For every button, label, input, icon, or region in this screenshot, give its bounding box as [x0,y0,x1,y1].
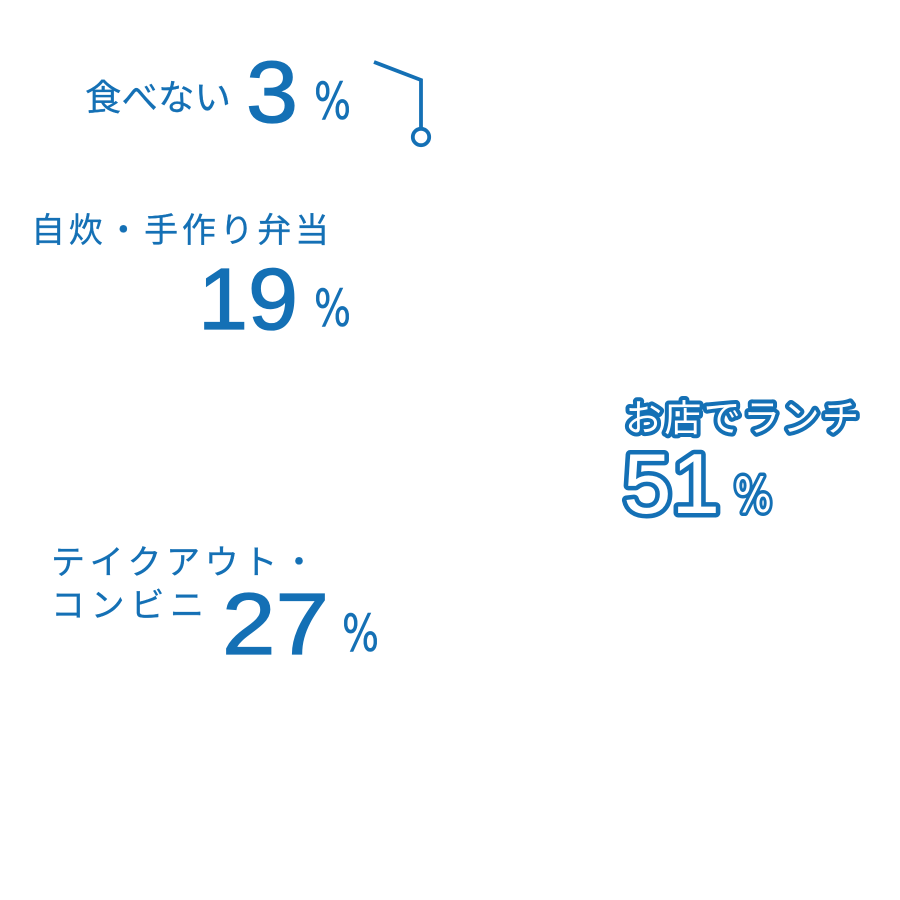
unit: percent: % [314,73,351,132]
unit: percent: % [734,468,772,524]
item: eating out 51% [623,398,859,532]
label: takeout: テイクアウト・ [51,544,316,582]
label: restaurant lunch: お店でランチ [625,398,859,439]
unit: percent: % [314,280,351,339]
value: 51: 51 [623,437,720,532]
unit: percent: % [342,605,379,664]
value: 3: 3 [246,44,298,141]
label: no lunch: 食べない [85,77,231,118]
value: 19: 19 [198,251,298,348]
label: convenience store: コンビニ [51,587,204,625]
value: 27: 27 [222,576,329,673]
item: home-made lunch 19% [31,212,351,348]
item: takeout or convenience store 27% [51,544,379,673]
leader line with ring marker [374,62,429,145]
label: home-made bento: 自炊・手作り弁当 [31,212,329,250]
item: no lunch 3% [85,44,429,145]
